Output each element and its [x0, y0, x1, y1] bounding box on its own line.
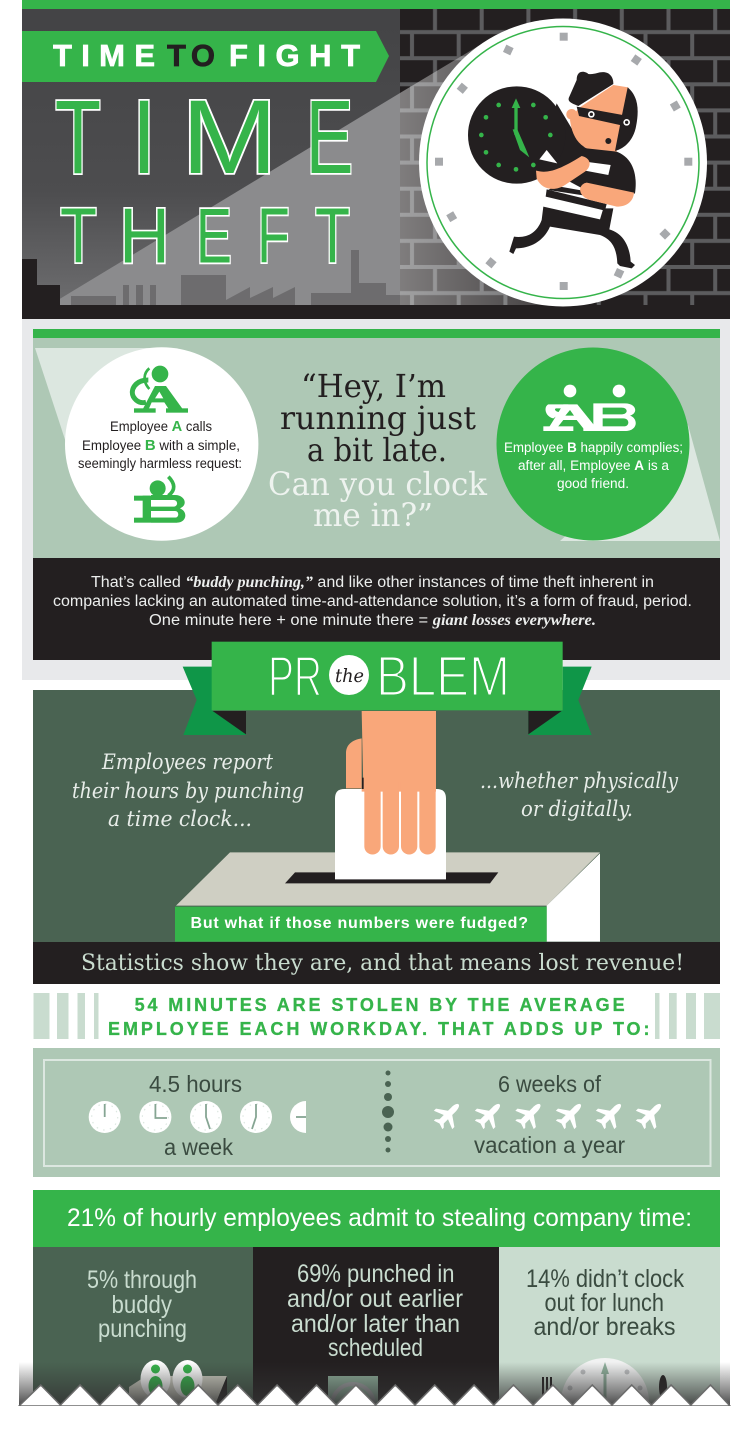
title: time theft: T: [55, 79, 101, 196]
callout: 54 minutes: EMPLOYEE EACH WORKDAY. THAT ADDS UP TO:: [108, 1019, 650, 1039]
column: lunch and breaks: [499, 1247, 720, 1430]
thief head: [566, 72, 638, 152]
text: employee A: seemingly harmless request:: [78, 456, 242, 471]
heading ribbon: [183, 642, 592, 735]
column: buddy punching: punching: [98, 1315, 187, 1343]
text: employee B: after all, Employee A is a: [518, 458, 670, 473]
banner: time to fight: TO: [167, 38, 215, 73]
title: time theft: M: [181, 79, 278, 196]
column: lunch and breaks: out for lunch: [544, 1289, 664, 1317]
quote: “Hey, I’m: [301, 367, 446, 405]
title: time theft: [55, 78, 353, 280]
quote: a bit late.: [307, 431, 447, 469]
title: time theft: F: [257, 194, 290, 280]
text: punching left: their hours by punching: [72, 779, 304, 803]
banner: time to fight: TIME: [53, 38, 155, 73]
money bag clock: [468, 86, 590, 184]
column: punched early or late: and/or out earlier: [287, 1285, 463, 1313]
thief legs: [509, 207, 635, 268]
stat: vacation a year: 6 weeks of: [498, 1071, 602, 1097]
stat: vacation a year: [429, 1071, 670, 1158]
callout: 54 minutes: [34, 993, 720, 1039]
column: punched early or late: scheduled: [328, 1334, 423, 1362]
explanation band: [33, 558, 720, 660]
heading text: BLEM: [376, 644, 510, 708]
text: punching left: [72, 750, 304, 831]
title: time theft: H: [119, 192, 170, 279]
text: punching right: or digitally.: [521, 797, 633, 821]
text: employee B: Employee B happily complies;: [504, 440, 683, 455]
text: punching left: a time clock...: [108, 807, 252, 831]
column: buddy punching: 5% through: [87, 1266, 197, 1294]
title: time theft: E: [196, 193, 232, 280]
heading text: [268, 644, 510, 708]
stat: hours a week: 4.5 hours: [149, 1071, 242, 1097]
plane icons: [429, 1095, 670, 1134]
clock ticks: [435, 33, 692, 290]
text: employee A: Employee B with a simple,: [82, 437, 240, 454]
column: punched early or late: [253, 1247, 499, 1426]
text: punching right: [480, 769, 679, 821]
callout: 54 minutes: 54 MINUTES ARE STOLEN BY THE AVERAGE: [135, 995, 625, 1015]
band: statistics: Statistics show they are, and that means lost revenue!: [81, 950, 684, 976]
icon: employees A and B: [543, 385, 636, 431]
thief torso: [546, 147, 636, 211]
panel: the problem: [33, 642, 720, 942]
icon: lunch clock: [542, 1358, 667, 1430]
band: statistics: [33, 942, 720, 984]
text: punching right: ...whether physically: [480, 769, 679, 793]
title: time theft: T: [60, 192, 97, 279]
panel: header: [22, 0, 730, 319]
torn paper edge: [0, 1362, 750, 1430]
stat: hours a week: [88, 1075, 306, 1155]
quote: running just: [280, 399, 476, 437]
thief: [468, 72, 638, 268]
explanation band: One minute here + one minute there = giant losses everywhere.: [149, 612, 596, 629]
text: employee B: [504, 440, 683, 491]
light beam: [48, 45, 560, 306]
quote: me in?”: [313, 496, 433, 534]
city skyline: [22, 250, 400, 306]
explanation band: companies lacking an automated time-and-attendance solution, it’s a form of fraud, period.: [53, 593, 692, 610]
heading: 21 percent: [33, 1190, 720, 1247]
heading text: the: [335, 665, 364, 687]
quote: [268, 367, 488, 534]
title: time theft: E: [306, 79, 353, 196]
employee B circle: [496, 348, 690, 540]
clock with thief: [419, 18, 707, 306]
clock icons: [89, 1101, 322, 1133]
title: time theft: I: [132, 78, 156, 196]
column: punched early or late: 69% punched in: [297, 1260, 454, 1288]
divider dots: [382, 1070, 394, 1152]
stat: hours a week: a week: [164, 1134, 233, 1160]
panel: buddy punching: [22, 319, 730, 680]
icon: employee B on phone: [134, 477, 185, 523]
icon: two employees at box: [129, 1360, 227, 1405]
quote: Can you clock: [268, 465, 488, 503]
banner: time to fight: [22, 31, 389, 82]
text: employee A: Employee A calls: [110, 418, 212, 435]
stat: vacation a year: vacation a year: [474, 1132, 625, 1158]
banner: time to fight: FIGHT: [229, 38, 360, 73]
column: buddy punching: [33, 1247, 253, 1410]
employee A circle: [65, 347, 258, 541]
icon: employee A on phone: [132, 366, 188, 413]
panel: totals: [33, 1048, 720, 1177]
column: buddy punching: buddy: [112, 1291, 172, 1319]
text: numbers fudged: But what if those numbers were fudged?: [190, 915, 528, 932]
explanation band: That’s called “buddy punching,” and like other instances of time theft inherent in: [91, 574, 654, 591]
ballot box and hand: [175, 711, 600, 942]
text: punching left: Employees report: [101, 750, 274, 774]
column: lunch and breaks: and/or breaks: [534, 1313, 676, 1341]
thief arms: [536, 156, 634, 207]
heading text: PR: [268, 644, 322, 708]
heading: 21 percent: 21% of hourly employees admit to stealing company time:: [67, 1204, 692, 1232]
title: time theft: T: [315, 193, 350, 280]
column: punched early or late: and/or later than: [291, 1310, 460, 1338]
column: lunch and breaks: 14% didn’t clock: [526, 1265, 684, 1293]
text: employee A: [78, 418, 242, 471]
icon: time clock: [328, 1376, 378, 1426]
text: employee B: good friend.: [557, 476, 629, 491]
